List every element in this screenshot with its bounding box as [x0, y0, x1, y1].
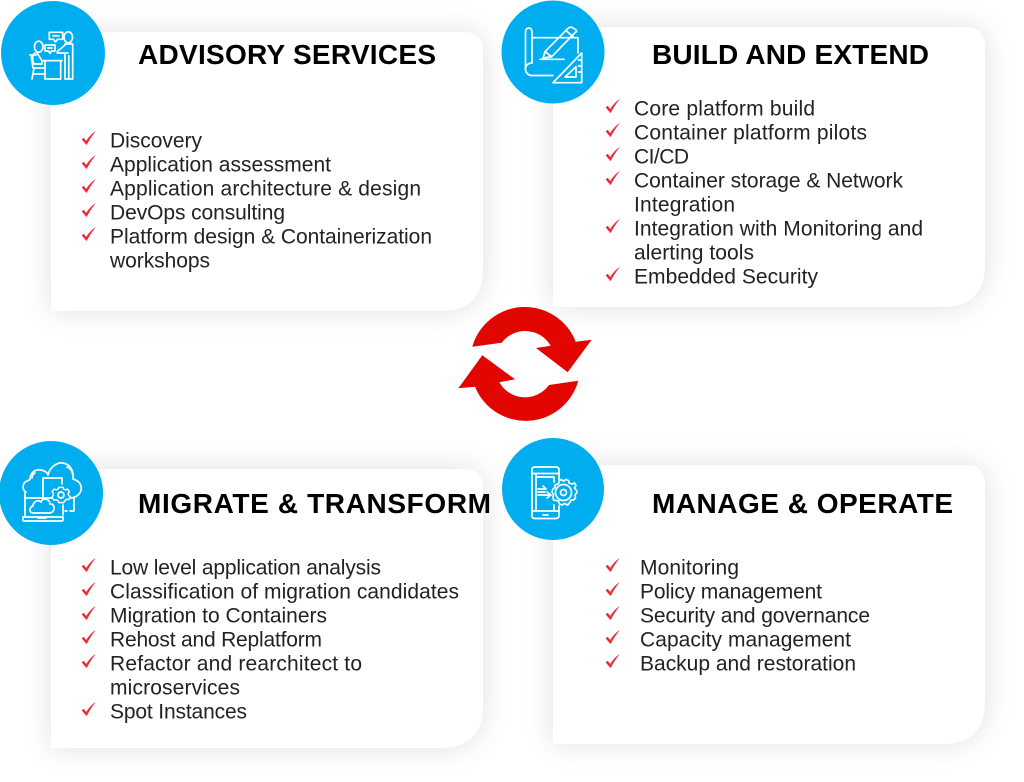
- list: manage and operate: Monitoring: [640, 556, 739, 580]
- list: build and extend: Integration with Monitoring and: [634, 218, 923, 240]
- list: build and extend: Core platform build: [634, 98, 815, 120]
- list: advisory services: DevOps consulting: [110, 202, 285, 224]
- list: manage and operate: [606, 556, 870, 676]
- list: build and extend: Integration: [634, 194, 735, 216]
- heading: build and extend: BUILD AND EXTEND: [652, 39, 929, 70]
- list: build and extend: CI/CD: [634, 146, 689, 168]
- heading: manage and operate: MANAGE & OPERATE: [652, 488, 953, 519]
- list: build and extend: alerting tools: [634, 242, 754, 264]
- list: manage and operate: Policy management: [640, 580, 822, 604]
- list: advisory services: Discovery: [110, 130, 202, 152]
- list: migrate and transform: Refactor and rearchitect to: [110, 652, 362, 676]
- list: advisory services: [82, 130, 432, 272]
- icon: blueprint pencil and set square: [502, 0, 604, 104]
- list: migrate and transform: [82, 556, 459, 724]
- list: build and extend: Container storage & Network: [634, 170, 904, 192]
- list: advisory services: Application architecture & design: [110, 178, 421, 200]
- panel: build and extend: [553, 27, 985, 307]
- list: migrate and transform: Spot Instances: [110, 700, 247, 724]
- panel: manage and operate: [553, 465, 985, 744]
- heading: migrate and transform: MIGRATE & TRANSFORM: [138, 488, 491, 519]
- list: advisory services: Platform design & Containerization: [110, 226, 432, 248]
- panel: advisory services: [51, 32, 483, 311]
- list: manage and operate: Security and governance: [640, 604, 870, 628]
- icon: phone and gear: [502, 438, 604, 540]
- list: migrate and transform: Migration to Containers: [110, 604, 327, 628]
- list: migrate and transform: Low level application analysis: [110, 556, 381, 580]
- heading: advisory services: ADVISORY SERVICES: [138, 39, 436, 70]
- list: manage and operate: Capacity management: [640, 628, 851, 652]
- panel: migrate and transform: [51, 469, 491, 748]
- list: migrate and transform: microservices: [110, 676, 240, 700]
- icon: cloud laptop and gear: [0, 441, 103, 545]
- icon: cycle arrows: [458, 307, 592, 421]
- list: migrate and transform: Classification of migration candidates: [110, 580, 459, 604]
- list: build and extend: Embedded Security: [634, 266, 818, 288]
- list: advisory services: workshops: [109, 250, 210, 272]
- list: migrate and transform: Rehost and Replatform: [110, 628, 322, 652]
- list: manage and operate: Backup and restoration: [640, 652, 856, 676]
- list: build and extend: Container platform pilots: [634, 122, 867, 144]
- list: build and extend: [606, 98, 923, 288]
- list: advisory services: Application assessment: [110, 154, 331, 176]
- icon: advisory people at desk: [1, 1, 105, 105]
